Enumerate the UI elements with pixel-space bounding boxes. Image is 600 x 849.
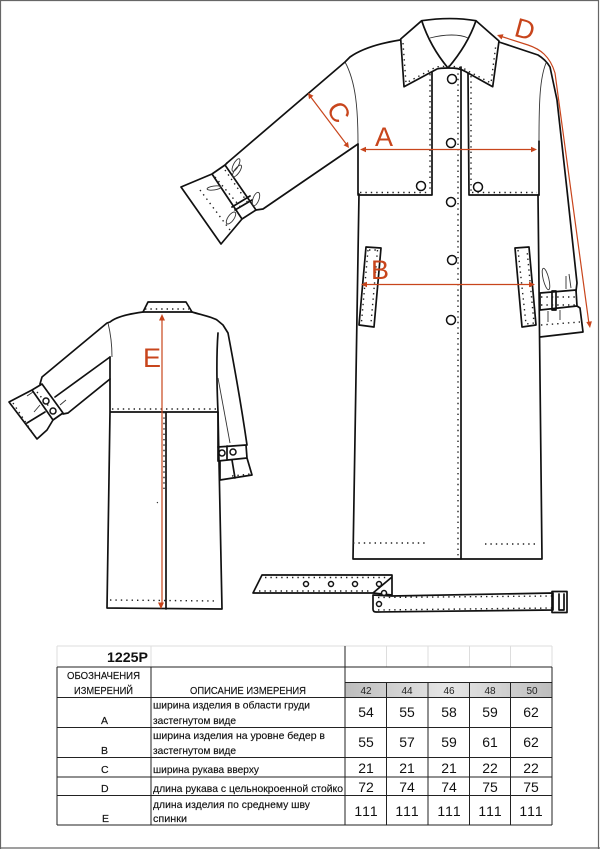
row C: 21 [441, 760, 457, 776]
table grid [57, 646, 552, 825]
row C: 22 [482, 760, 498, 776]
row E: длина изделия по среднему шву [153, 799, 311, 811]
row A: 59 [482, 704, 498, 720]
row A: A [101, 715, 108, 727]
measurement C: C [321, 96, 356, 128]
coat body [345, 62, 546, 559]
row D: 72 [358, 779, 374, 795]
row A: 62 [523, 704, 539, 720]
row E: 111 [519, 803, 543, 819]
measurement A [360, 122, 537, 152]
belt right piece with buckle [373, 592, 567, 612]
row E: 111 [437, 803, 461, 819]
row E: E [102, 813, 109, 825]
back view of coat [9, 302, 252, 609]
left pocket [359, 247, 381, 327]
right cuff [540, 268, 583, 337]
measurement D: D [512, 12, 538, 46]
row B: 57 [399, 734, 415, 750]
row D: 75 [523, 779, 539, 795]
row A: 58 [441, 704, 457, 720]
right sleeve [499, 42, 577, 291]
row A: 55 [399, 704, 415, 720]
table header labels: 50 [526, 686, 538, 697]
row D: 74 [399, 779, 415, 795]
model number: 1225Р [107, 649, 148, 665]
back body [107, 323, 222, 609]
measurement E: E [143, 343, 161, 373]
back collar [143, 302, 192, 312]
belt [253, 575, 567, 612]
row D: 75 [482, 779, 498, 795]
row D [101, 779, 539, 795]
back left sleeve [40, 312, 143, 414]
row D: 74 [441, 779, 457, 795]
collar [401, 19, 499, 87]
buttons [416, 74, 482, 324]
table header labels [67, 670, 538, 697]
row A: ширина изделия в области груди [153, 700, 310, 712]
table top faint grid [57, 646, 552, 667]
table header labels: 46 [443, 686, 455, 697]
left sleeve [227, 40, 400, 210]
row E: 111 [478, 803, 502, 819]
row E [102, 799, 543, 825]
row A: застегнутом виде [153, 715, 236, 727]
row B: B [101, 745, 108, 757]
table header labels: 44 [401, 686, 413, 697]
left cuff [181, 158, 261, 244]
table header labels: 48 [484, 686, 496, 697]
back right cuff [218, 412, 252, 480]
measurement B: B [371, 255, 389, 285]
measurement E [143, 314, 165, 609]
row B: 59 [441, 734, 457, 750]
row C: 22 [523, 760, 539, 776]
row B: 55 [358, 734, 374, 750]
row B: 62 [523, 734, 539, 750]
row E: 111 [354, 803, 378, 819]
back right sleeve [192, 312, 247, 445]
table header labels: 42 [360, 686, 372, 697]
row C: 21 [358, 760, 374, 776]
table header labels: ОБОЗНАЧЕНИЯ [67, 670, 140, 682]
table header labels: ОПИСАНИЕ ИЗМЕРЕНИЯ [190, 685, 306, 697]
row C [101, 760, 539, 776]
row D: длина рукава с цельнокроенной стойко [153, 783, 343, 795]
row B: застегнутом виде [153, 745, 236, 757]
row E: 111 [395, 803, 419, 819]
front view of coat [181, 19, 583, 559]
belt left piece [253, 575, 392, 596]
measurement C [308, 93, 356, 148]
row E: спинки [153, 813, 187, 825]
measurement D [497, 12, 592, 328]
row D: D [101, 783, 109, 795]
size header shading [345, 682, 552, 698]
table header labels: ИЗМЕРЕНИЙ [74, 684, 133, 697]
row B: ширина изделия на уровне бедер в [153, 730, 325, 742]
row A [101, 700, 539, 727]
row B [101, 730, 539, 757]
row C: ширина рукава вверху [153, 764, 260, 776]
row A: 54 [358, 704, 374, 720]
row C: C [101, 764, 109, 776]
size table [57, 646, 552, 825]
right pocket [515, 247, 536, 327]
back left cuff [9, 384, 66, 439]
measurement B [361, 255, 535, 287]
measurement A: A [375, 122, 393, 152]
row C: 21 [399, 760, 415, 776]
row B: 61 [482, 734, 498, 750]
